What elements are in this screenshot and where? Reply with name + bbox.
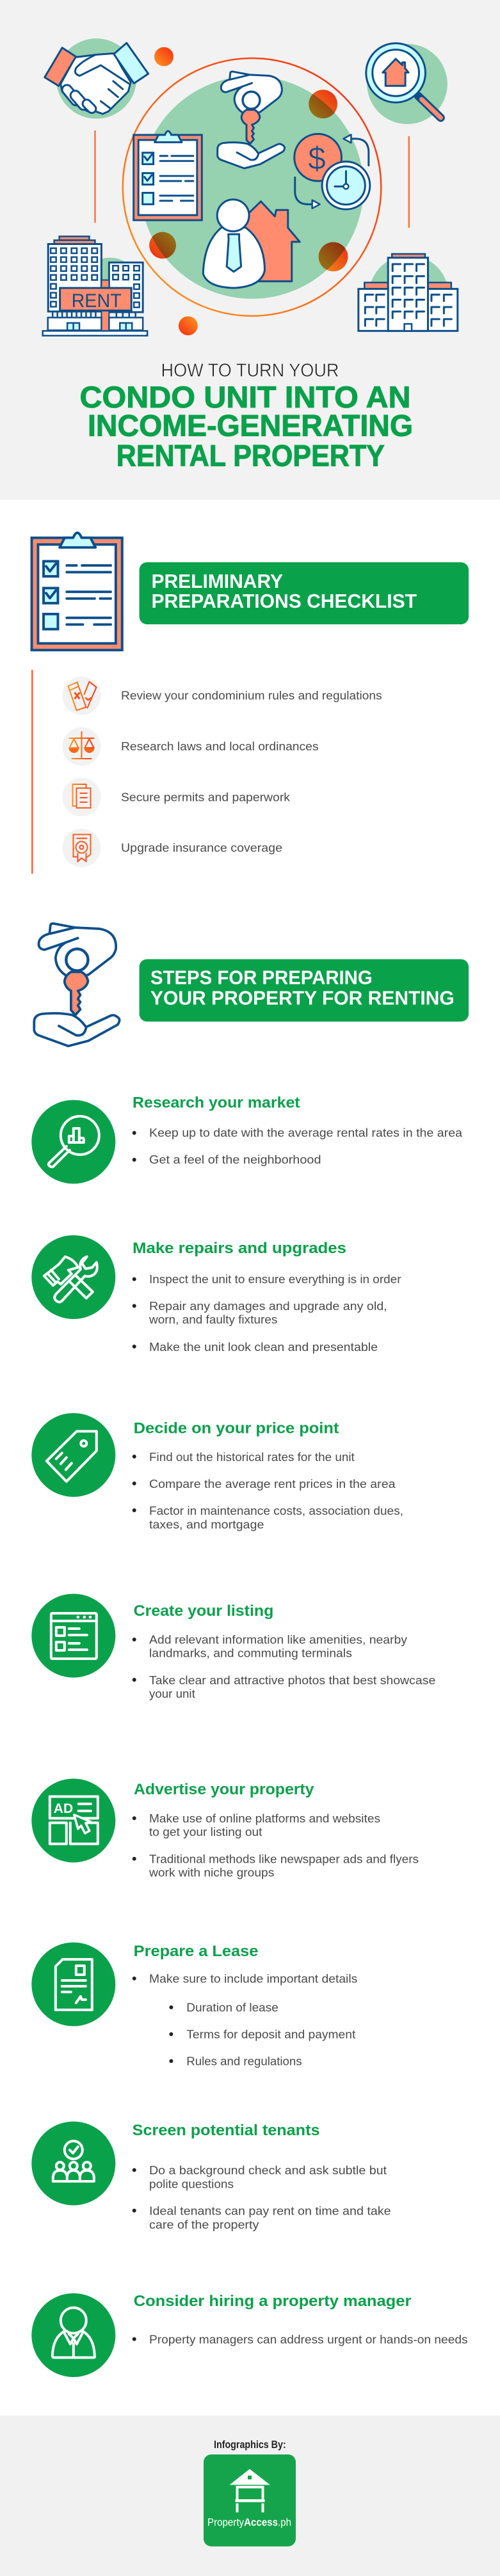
icon: handshake [45,38,149,119]
step: decide on your price point [31,1413,403,1531]
step: create your listing: your unit [149,1687,195,1700]
icon: agent and house [203,200,300,288]
icon: lease document [31,1942,115,2027]
step: make repairs and upgrades: Repair any damages and upgrade any old, [149,1300,387,1313]
checklist item 4 [63,829,282,867]
icon: clipboard checklist [134,131,202,220]
step: research your market: Research your market [133,1094,300,1112]
step: screen potential tenants: Do a background check and ask subtle but [149,2164,387,2177]
orange gradient ring [123,58,381,316]
green central disc [140,76,364,299]
step: decide on your price point: Compare the average rent prices in the area [149,1478,396,1490]
step: advertise your property [31,1778,419,1879]
step: prepare a lease: Rules and regulations [186,2055,302,2068]
step: decide on your price point: taxes, and mortgage [149,1518,264,1531]
checklist item 2: Research laws and local ordinances [121,740,319,753]
heading: steps for preparing your property [140,960,469,1022]
step: make repairs and upgrades: Make the unit look clean and presentable [149,1341,378,1354]
checklist item 3: Secure permits and paperwork [121,791,291,803]
checklist item 3 [63,778,291,816]
icon: condo towers [359,254,458,331]
step: consider hiring a property manager: Property managers can address urgent or hands-on needs [149,2334,468,2346]
step: make repairs and upgrades: Make repairs and upgrades [133,1240,346,1257]
step: create your listing [31,1594,435,1700]
checklist item 4: Upgrade insurance coverage [121,842,282,855]
orange vertical connector right [408,136,410,228]
step: decide on your price point: Find out the historical rates for the unit [149,1451,355,1464]
step: screen potential tenants: Screen potential tenants [133,2122,319,2139]
orange vertical connector left [94,130,96,223]
accent dot bottom [179,316,198,335]
icon: section key hand [34,924,120,1046]
hero illustration [43,38,458,336]
step: decide on your price point: Factor in maintenance costs, association dues, [149,1505,403,1517]
step: consider hiring a property manager [31,2293,468,2377]
icon: magnifier with house [366,43,448,124]
icon: listing window [31,1594,115,1677]
step: prepare a lease: Prepare a Lease [134,1943,258,1960]
accent dot top [154,47,173,66]
panel: footer background [0,2415,500,2576]
step: create your listing: Take clear and attractive photos that best showcase [149,1674,435,1687]
step: advertise your property: Make use of online platforms and websites [149,1812,380,1825]
icon: rent building [43,237,147,336]
step: screen potential tenants [31,2121,391,2231]
step: make repairs and upgrades [31,1235,401,1354]
icon: ad board with cursor: AD [54,1801,73,1816]
step: decide on your price point: Decide on your price point [134,1420,339,1437]
step: make repairs and upgrades: Inspect the unit to ensure everything is in order [149,1273,401,1286]
heading: preliminary preparations checklist: PRELIMINARY [151,570,283,592]
step: advertise your property: Traditional methods like newspaper ads and flyers [149,1853,419,1865]
icon: dollar coin and clock cycle: $ [308,141,326,177]
step: prepare a lease: Terms for deposit and payment [186,2028,355,2041]
icon: hammer and wrench [31,1235,115,1319]
icon: tenants with check [31,2121,115,2206]
panel: checklist [31,670,382,874]
heading: steps for preparing your property: STEPS FOR PREPARING [150,966,373,988]
step: research your market [31,1094,463,1183]
step: consider hiring a property manager: Consider hiring a property manager [134,2293,411,2310]
step: create your listing: Add relevant information like amenities, nearby [149,1634,407,1647]
step: research your market: Keep up to date with the average rental rates in the area [149,1126,463,1139]
icon: section clipboard [32,533,122,650]
step: advertise your property: Advertise your property [134,1781,314,1798]
step: prepare a lease: Duration of lease [186,2002,278,2014]
title line 3: RENTAL PROPERTY [117,438,385,472]
step: create your listing: Create your listing [134,1602,273,1620]
logo: PropertyAccess.ph [204,2454,296,2547]
step: screen potential tenants: Ideal tenants can pay rent on time and take [149,2204,391,2217]
title line 2: INCOME-GENERATING [88,409,413,443]
icon: price tag [31,1413,115,1497]
multiply accent dots [149,90,348,271]
step: research your market: Get a feel of the neighborhood [149,1153,321,1166]
icon: dollar coin and clock cycle [294,134,370,209]
checklist item 1: Review your condominium rules and regulations [121,690,382,702]
step: prepare a lease: Make sure to include important details [149,1973,357,1986]
heading: steps for preparing your property: YOUR PROPERTY FOR RENTING [150,986,455,1009]
icon: ad board with cursor [31,1778,115,1863]
heading: preliminary preparations checklist: PREPARATIONS CHECKLIST [151,590,417,612]
icon: hand passing key [218,72,285,168]
title eyebrow: HOW TO TURN YOUR [161,361,339,381]
checklist item 1 [63,677,382,715]
step: advertise your property: work with niche groups [149,1867,274,1879]
icon: property manager [31,2293,115,2377]
step: make repairs and upgrades: worn, and faulty fixtures [149,1313,277,1326]
footer credit: Infographics By: [214,2438,286,2451]
icon: magnifier chart [31,1100,115,1183]
sign label: RENT [72,290,122,312]
step: advertise your property: to get your listing out [149,1826,262,1838]
title [79,361,413,472]
logo: PropertyAccess.ph: PropertyAccess.ph [207,2517,291,2529]
step: screen potential tenants: care of the property [149,2218,259,2231]
panel: hero background [0,0,500,500]
checklist item 2 [63,727,319,766]
step: create your listing: landmarks, and commuting terminals [149,1647,352,1660]
heading: preliminary preparations checklist [140,562,469,624]
title line 1: CONDO UNIT INTO AN [79,380,411,414]
step: prepare a lease [31,1942,357,2068]
step: screen potential tenants: polite questions [149,2177,234,2190]
